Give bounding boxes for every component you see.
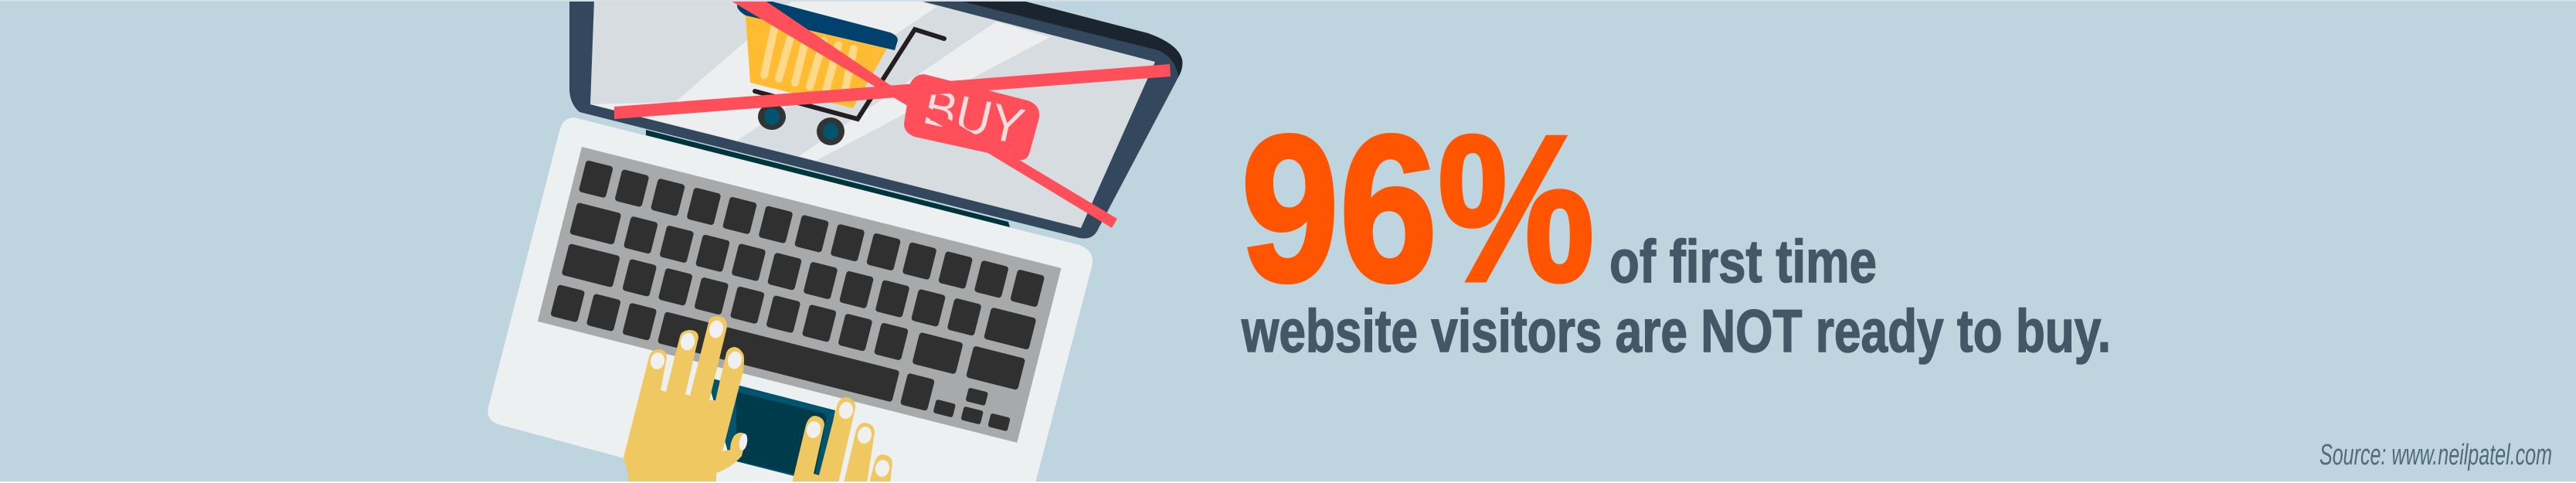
laptop base <box>488 117 1093 483</box>
keys row 4 with space bar and arrows <box>550 284 1015 431</box>
headline line 2: website visitors are NOT ready to buy. <box>1241 297 2111 365</box>
icon: right hand <box>792 397 892 483</box>
illustration: laptop with crossed-out shopping cart <box>488 0 1182 483</box>
laptop screen <box>590 0 1155 228</box>
big stat: 96%: 96% <box>1241 93 1595 325</box>
red cross <box>614 0 1171 228</box>
keyboard <box>538 147 1061 443</box>
laptop lid <box>569 0 1182 239</box>
trackpad <box>707 377 835 483</box>
keys row 1 <box>579 160 1045 308</box>
keys row 3 <box>562 243 1025 390</box>
buy tag <box>904 74 1039 160</box>
icon: left hand <box>624 316 749 483</box>
icon: shopping cart <box>737 0 944 145</box>
buy label: BUY <box>919 77 1029 155</box>
headline line 1: of first time <box>1609 227 1877 295</box>
keys row 2 <box>569 202 1036 350</box>
